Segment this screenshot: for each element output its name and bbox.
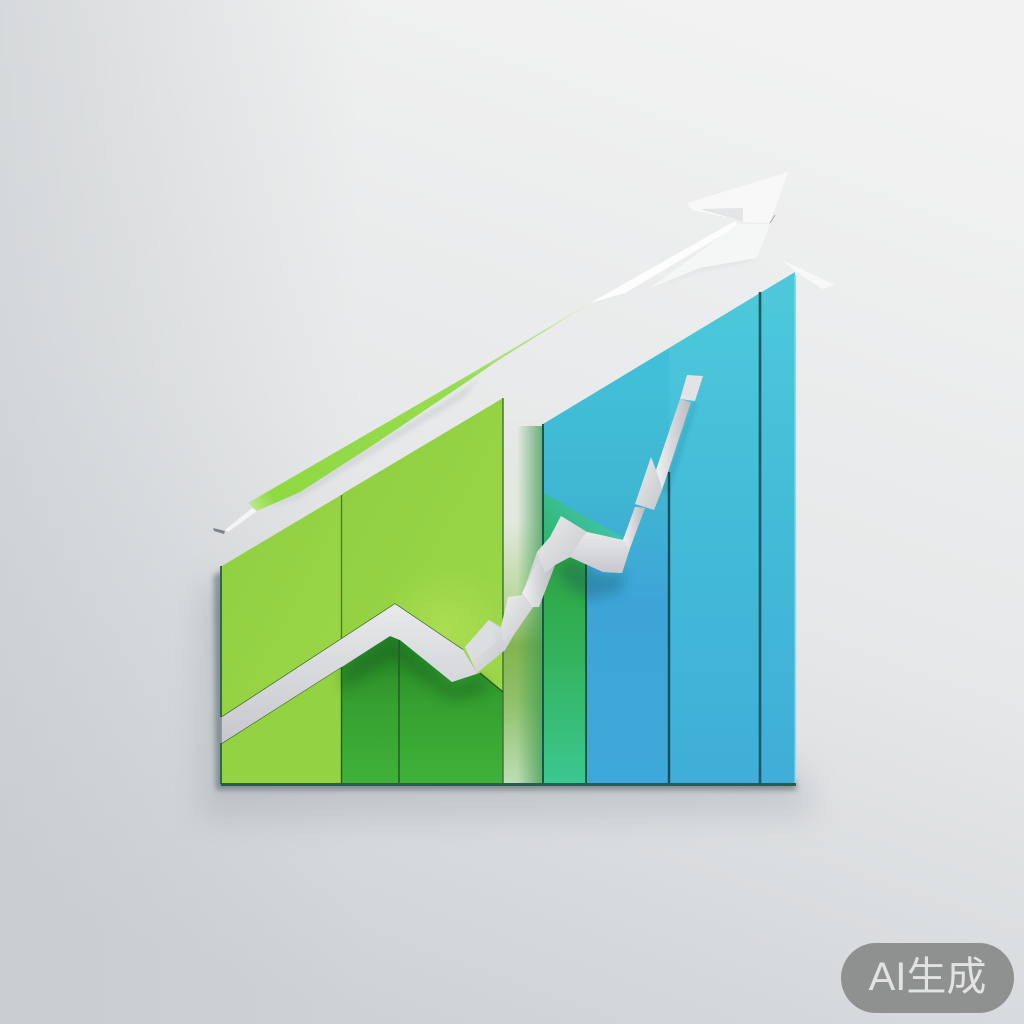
left green upper block: [222, 495, 341, 717]
second chunk: [501, 595, 533, 642]
trend underlay: [465, 507, 645, 673]
stripe shadow: [268, 378, 480, 508]
teal band: [543, 493, 628, 565]
first fold: [465, 620, 505, 673]
fold highlight: [635, 457, 662, 510]
panel: green bars: [222, 398, 543, 784]
faded gap bar: [503, 420, 543, 784]
diagonal stripe to arrow: [213, 221, 757, 534]
badge: AI generated: AI生成: [869, 955, 986, 999]
trend line shadow: [342, 402, 697, 700]
left green lower block: [222, 667, 341, 784]
bar dividers: [221, 292, 760, 784]
lower rising stem: [623, 507, 645, 548]
top tab: [680, 375, 703, 401]
arrow lower wing: [650, 224, 770, 288]
badge: AI generated: [841, 943, 1014, 1013]
white trend line: [222, 375, 703, 743]
green stripe: [248, 303, 590, 511]
green highlight glow: [395, 560, 503, 692]
blue left area: [543, 348, 669, 784]
upper horizontal segment: [570, 532, 630, 573]
green mid bar: [543, 530, 586, 784]
rising connector: [522, 556, 555, 607]
panel bottom edge: [221, 275, 796, 786]
panel: blue bars: [543, 272, 795, 784]
arrow shaft shadow: [660, 235, 757, 288]
crumpled middle segment: [537, 516, 587, 573]
grey tip: [213, 528, 225, 534]
rising shaft: [656, 399, 691, 490]
arrow edge: [770, 215, 775, 223]
icon: arrow head: [650, 172, 835, 289]
dark green bars: [342, 636, 503, 784]
small arrow tip on blue panel: [782, 260, 835, 289]
arrow inner shade: [700, 208, 743, 222]
chart shadow: [200, 570, 815, 820]
arrow upper wing: [687, 172, 788, 223]
white arrow shaft: [590, 221, 738, 303]
blue right area: [669, 272, 795, 784]
centre green upper block: [342, 398, 503, 692]
grey tail of stripe: [225, 508, 257, 532]
white line lower segment: [222, 604, 477, 743]
